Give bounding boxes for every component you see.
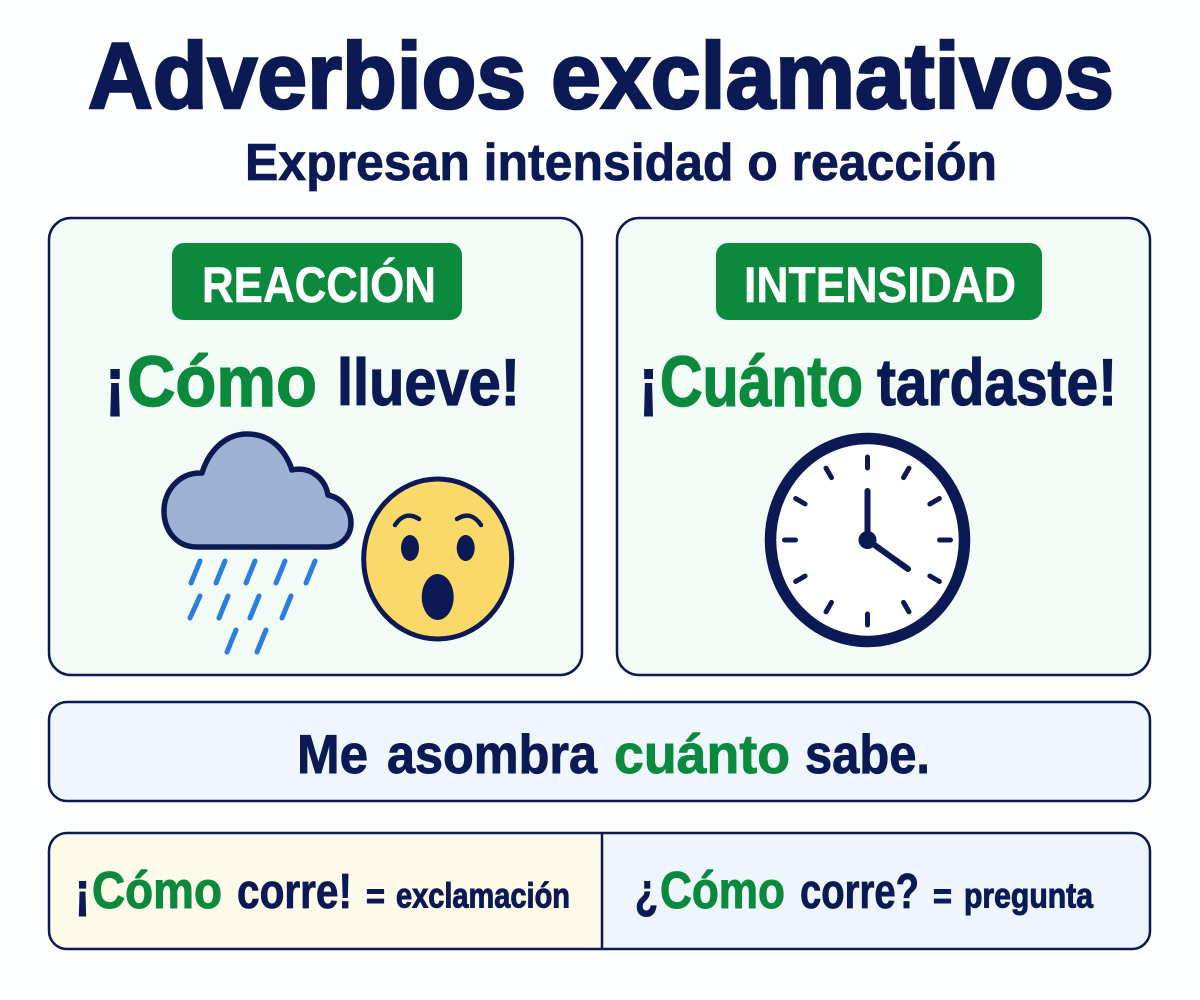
text: question example: pregunta: [964, 876, 1093, 916]
panel: intensidad: [617, 218, 1150, 675]
subtitle: Expresan intensidad o reacción: [245, 134, 997, 192]
badge: intensidad: INTENSIDAD: [744, 257, 1016, 313]
text: me asombra cuánto sabe: sabe.: [805, 723, 930, 785]
sentence: cómo llueve: ¡: [105, 344, 125, 420]
panel: comparison: [49, 833, 1150, 949]
sentence: cómo llueve: Cómo: [127, 343, 317, 422]
text: me asombra cuánto sabe: cuánto: [614, 723, 790, 785]
text: me asombra cuánto sabe: Me: [297, 723, 368, 785]
text: exclamation example: =: [366, 875, 385, 916]
text: question example: corre?: [800, 865, 919, 919]
sentence: cómo llueve: llueve!: [337, 345, 520, 419]
icon: rain cloud: [164, 434, 351, 652]
text: exclamation example: corre!: [237, 865, 352, 919]
sentence: cuánto tardaste: [639, 343, 1117, 422]
text: exclamation example: ¡: [75, 863, 90, 919]
badge: reacción: [172, 243, 462, 320]
text: exclamation example: exclamación: [396, 876, 570, 916]
text: question example: Cómo: [660, 862, 785, 920]
sentence: cuánto tardaste: Cuánto: [660, 343, 863, 422]
icon: rain drops: [190, 561, 315, 652]
icon: clock: [770, 438, 964, 642]
panel: example sentence: [49, 702, 1150, 801]
text: exclamation example: Cómo: [92, 862, 222, 920]
sentence: cuánto tardaste: tardaste!: [877, 345, 1117, 419]
text: me asombra cuánto sabe: [297, 723, 930, 785]
sentence: cómo llueve: [105, 343, 520, 422]
text: exclamation example: [75, 862, 570, 920]
badge: reacción: REACCIÓN: [202, 257, 436, 313]
text: question example: ¿: [635, 863, 658, 919]
text: me asombra cuánto sabe: asombra: [387, 723, 597, 785]
title: Adverbios exclamativos: [88, 23, 1114, 128]
badge: intensidad: [716, 243, 1042, 320]
panel: reacción: [49, 218, 582, 675]
text: question example: [635, 862, 1093, 920]
sentence: cuánto tardaste: ¡: [639, 344, 658, 420]
text: question example: =: [933, 875, 952, 916]
icon: surprised face: [364, 479, 512, 639]
